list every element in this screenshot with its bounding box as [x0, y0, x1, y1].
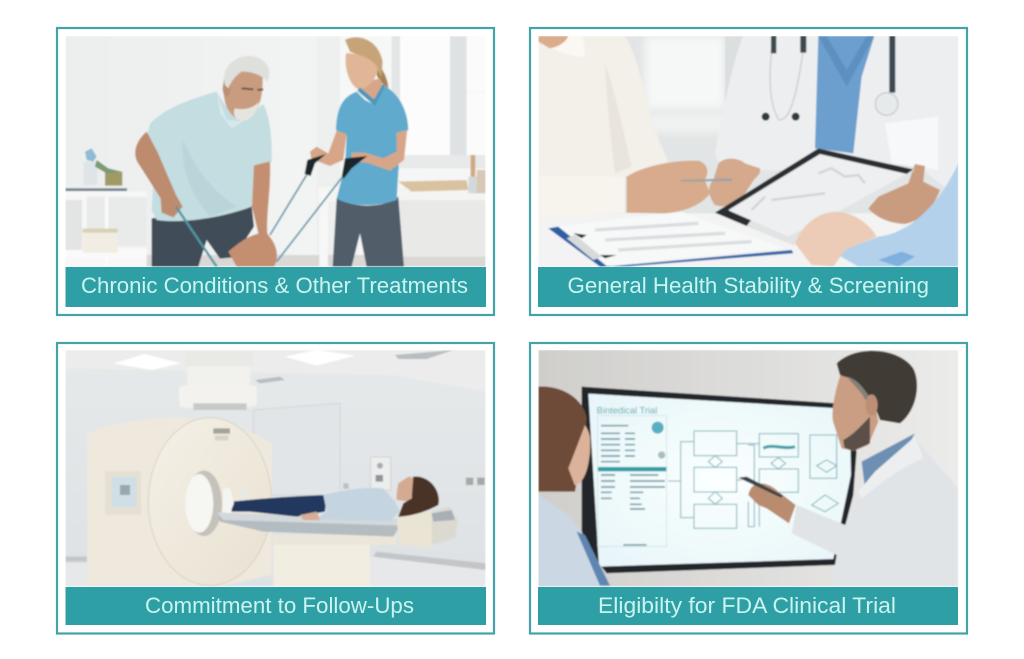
panel frame — [530, 343, 967, 634]
table — [538, 213, 912, 266]
ceiling-mounted gantry — [180, 371, 256, 410]
caption banner: Chronic Conditions & Other Treatments — [81, 273, 468, 298]
panel: chronic conditions and other treatments — [57, 28, 494, 315]
wall panel and switches — [343, 457, 485, 490]
caption banner: General Health Stability & Screening — [568, 273, 929, 298]
man pointing with stylus — [738, 351, 958, 587]
window — [392, 36, 486, 169]
photo: clinicians reviewing trial flowchart — [538, 350, 958, 587]
patient lying down — [223, 477, 439, 521]
ceiling lights — [113, 350, 453, 383]
clipboard with form — [548, 212, 793, 267]
panel frame — [530, 28, 967, 315]
caption banner — [538, 267, 958, 307]
photo: patient in CT scanner room — [65, 350, 486, 587]
side desk with tray — [318, 155, 486, 267]
caption banner — [538, 587, 958, 625]
wall monitor: Bintedical Trial — [597, 406, 657, 416]
photo: doctor reviewing tablet with patient — [538, 36, 958, 267]
patient table — [217, 507, 458, 587]
caption banner — [66, 587, 486, 625]
older man exercising — [135, 56, 277, 267]
hand holding pen — [627, 161, 732, 213]
caption banner: Eligibilty for FDA Clinical Trial — [598, 593, 896, 618]
patient in white shirt — [538, 36, 668, 219]
scanner — [87, 418, 272, 586]
panel frame — [57, 343, 494, 634]
wall monitor — [582, 387, 857, 573]
panel frame — [57, 28, 494, 315]
woman viewing monitor — [538, 387, 610, 587]
photo: physical therapy session — [65, 36, 486, 267]
caption banner: Commitment to Follow-Ups — [145, 593, 414, 618]
panel: commitment to follow-ups — [57, 343, 494, 634]
tablet — [715, 148, 915, 245]
doctor in white coat — [709, 36, 958, 224]
caption banner — [66, 267, 486, 307]
therapist with resistance bands — [176, 37, 408, 267]
shelf with plant and box — [65, 148, 147, 267]
panel: general health stability and screening — [530, 28, 967, 315]
foreground person sleeve and hand — [795, 163, 958, 267]
panel: eligibility for FDA clinical trial — [530, 343, 967, 634]
